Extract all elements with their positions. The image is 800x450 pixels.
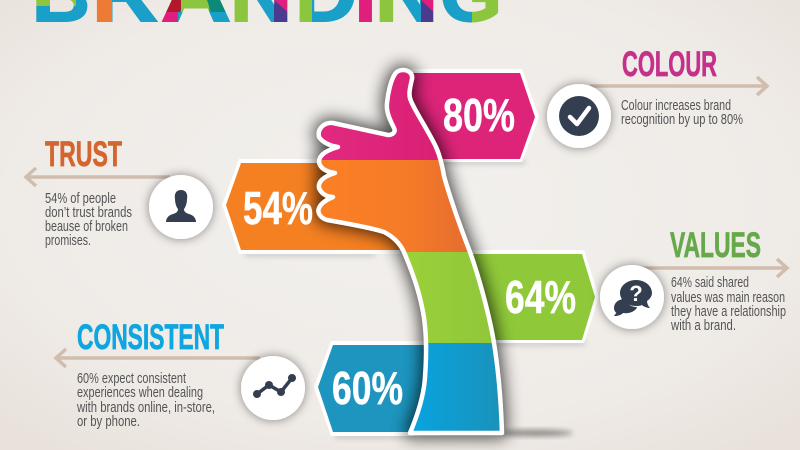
ribbon: 80%	[400, 69, 539, 162]
text block	[45, 190, 132, 249]
floor shadow	[497, 430, 573, 436]
stat: 60%: 60%	[332, 362, 403, 414]
text block	[76, 370, 215, 430]
text block: 64% said shared	[671, 274, 749, 291]
text block	[670, 274, 786, 334]
panel: consistent	[56, 318, 305, 430]
panel: trust	[26, 135, 213, 249]
text block: promises.	[45, 232, 91, 249]
arrow	[26, 168, 170, 186]
text block: with a brand.	[670, 317, 736, 334]
ribbon: 60%	[314, 341, 440, 436]
stat: 64%: 64%	[505, 271, 576, 323]
heading: CONSISTENT	[77, 318, 224, 357]
thumbs-up hand	[310, 60, 505, 438]
text block	[621, 97, 743, 128]
panel: values	[600, 226, 787, 334]
text block: with brands online, in-store,	[76, 399, 215, 416]
text block: recognition by up to 80%	[621, 111, 743, 128]
title	[32, 0, 502, 38]
stat: 80%: 80%	[443, 89, 515, 141]
icon: person	[149, 175, 213, 239]
text block: don’t trust brands	[45, 204, 132, 221]
panel: colour	[547, 45, 767, 148]
heading: COLOUR	[622, 45, 717, 84]
icon: check	[547, 84, 611, 148]
text block: or by phone.	[77, 413, 140, 430]
text block: experiences when dealing	[77, 384, 203, 401]
heading: TRUST	[45, 135, 122, 174]
ribbon: 54%	[222, 159, 400, 254]
text block: Colour increases brand	[621, 97, 731, 114]
icon: speech bubbles	[600, 265, 664, 329]
text block: 54% of people	[45, 190, 116, 207]
text block: beause of broken	[45, 218, 128, 235]
ribbon: 64%	[440, 250, 599, 343]
arrow	[56, 349, 260, 367]
icon: line chart	[241, 356, 305, 420]
stat: 54%: 54%	[243, 182, 313, 234]
icon: speech bubbles: ?	[629, 281, 643, 306]
arrow	[640, 259, 787, 277]
ribbon shadows	[245, 160, 585, 438]
text block: 60% expect consistent	[77, 370, 187, 387]
hand shadow	[318, 70, 502, 433]
arrow	[590, 77, 767, 95]
